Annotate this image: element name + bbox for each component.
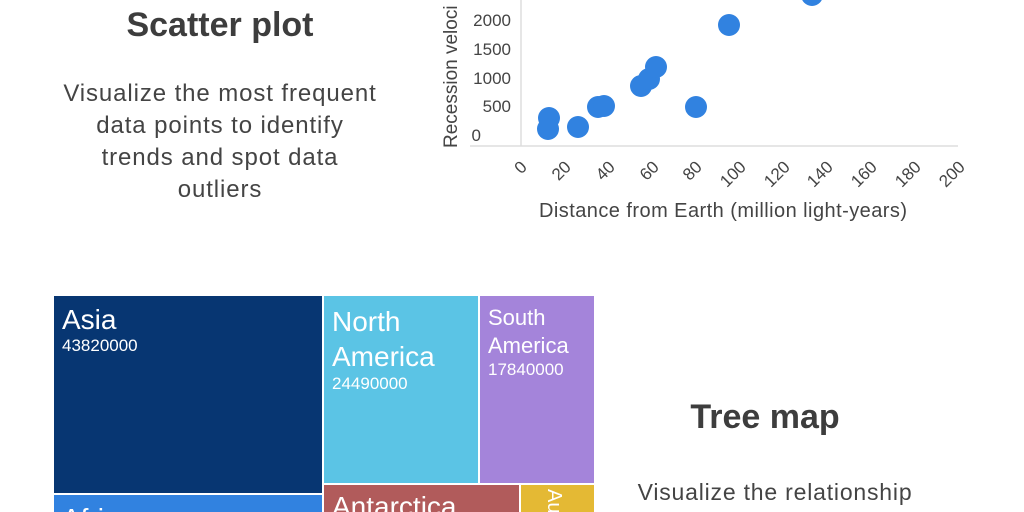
chart: scatter: 0 [511,157,531,178]
chart: scatter: 1000 [473,69,511,88]
chart: scatter: 180 [891,157,925,191]
chart: tree map [54,296,594,512]
title: tree map: Tree map [690,398,840,436]
chart: scatter: 0 [472,126,481,145]
chart: scatter: Distance from Earth (million light-years) [539,200,907,222]
cell: Asia [54,296,322,493]
chart: scatter: 60 [636,157,663,184]
text: scatter description: Visualize the most frequent [63,80,377,107]
cell: South America: 17840000 [488,360,564,379]
chart: scatter: 160 [847,157,881,191]
title: scatter plot: Scatter plot [126,6,314,44]
chart: scatter: 140 [803,157,837,191]
chart: scatter: 120 [760,157,794,191]
chart: scatter: 500 [483,97,511,116]
text: scatter description: trends and spot data [102,144,338,171]
cell: South America [480,296,594,483]
cell: South America: South America [488,305,569,358]
text: scatter description: outliers [178,176,262,203]
cell: North America: North America [332,306,435,372]
cell: Africa [54,495,322,512]
text: tree map description: Visualize the relationship [638,479,912,505]
chart: scatter: 80 [679,157,706,184]
cell: Antarctica [324,485,519,512]
cell: Australia [521,485,594,512]
chart: scatter: 40 [592,157,619,184]
chart: scatter: 2000 [473,11,511,30]
cell: Asia: 43820000 [62,336,138,355]
cell: North America [324,296,478,483]
chart: scatter: Recession veloci [441,5,462,148]
chart: scatter: 20 [548,157,575,184]
text: scatter description [63,80,377,203]
chart: scatter: 200 [935,157,969,191]
cell: Asia: Asia [62,304,116,335]
chart: scatter: 1500 [473,40,511,59]
text: scatter description: data points to identify [96,112,344,139]
chart: scatter: 100 [716,157,750,191]
chart: scatter [441,0,969,222]
cell: North America: 24490000 [332,374,408,393]
